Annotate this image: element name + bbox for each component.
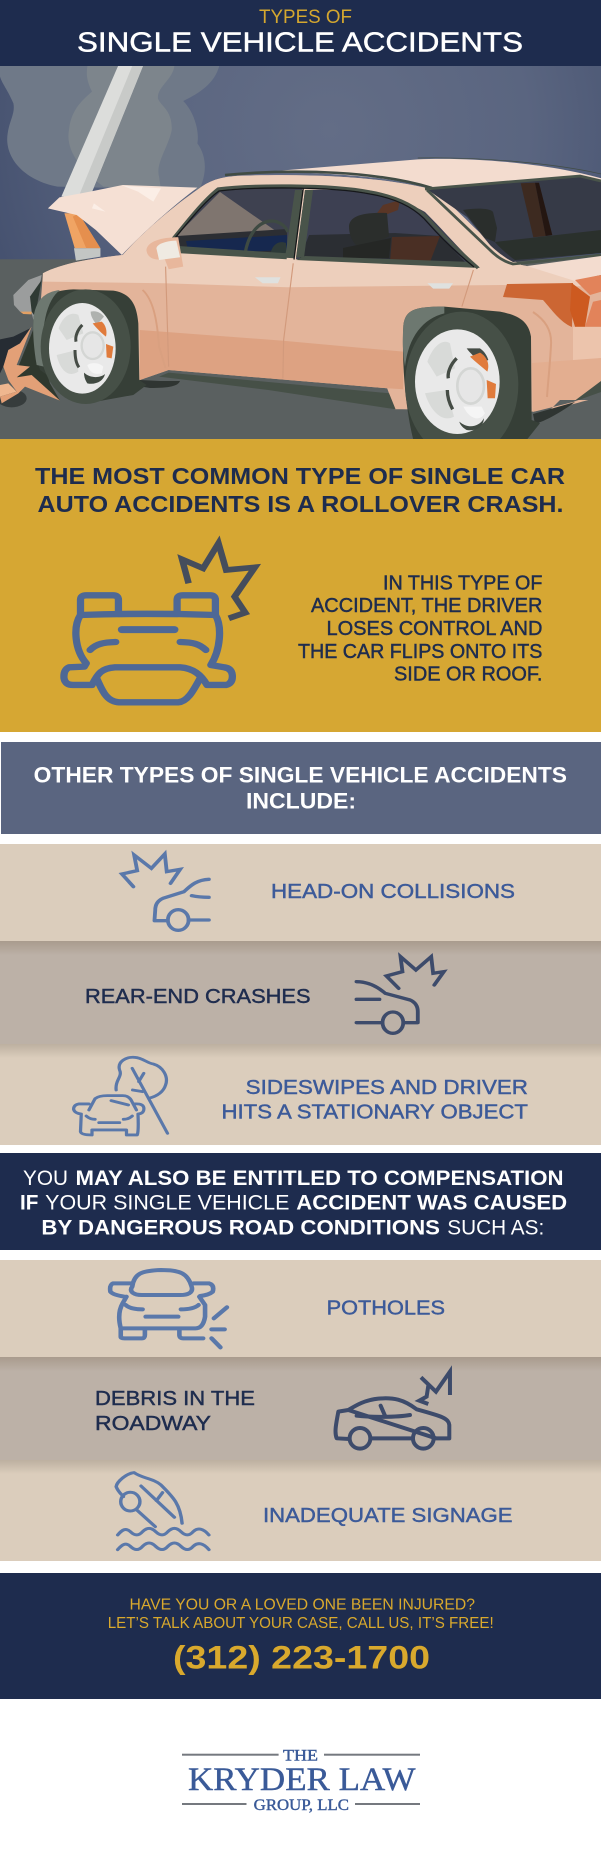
icon: rear impact — [356, 957, 444, 1033]
rear door window with seats — [172, 186, 480, 268]
rear window — [425, 176, 601, 264]
crushed bumper — [0, 275, 60, 407]
icon: overturned car with impact burst — [64, 543, 255, 702]
panel: other types heading — [1, 742, 601, 834]
panel: potholes — [0, 1260, 601, 1357]
text block: rollover description: THE CAR FLIPS ONTO ITS — [298, 641, 542, 663]
label — [222, 1076, 529, 1124]
road — [0, 259, 601, 439]
label: ROADWAY — [95, 1412, 211, 1435]
icon: car with impact bolt — [336, 1372, 450, 1449]
icon: car plunging into water — [116, 1473, 209, 1550]
label: INADEQUATE SIGNAGE — [263, 1504, 512, 1527]
panel: road conditions compensation: YOU — [23, 1167, 68, 1190]
label: DEBRIS IN THE — [95, 1387, 255, 1410]
text block: rollover description: ACCIDENT, THE DRIVER — [311, 595, 542, 617]
label: HEAD-ON COLLISIONS — [271, 880, 515, 903]
pole — [61, 66, 143, 261]
rear wheel — [402, 306, 540, 439]
front window — [176, 186, 303, 259]
mirror — [146, 237, 183, 269]
panel: inadequate signage — [0, 1460, 601, 1561]
heading: AUTO ACCIDENTS IS A ROLLOVER CRASH. — [38, 491, 564, 517]
label: REAR-END CRASHES — [85, 985, 310, 1008]
logo: the kryder law group: GROUP, LLC — [254, 1797, 349, 1814]
icon: car front with sparks — [110, 1270, 227, 1347]
smoke — [0, 66, 219, 190]
door handles — [255, 277, 453, 289]
heading — [35, 463, 565, 517]
call to action text: HAVE YOU OR A LOVED ONE BEEN INJURED? — [130, 1596, 475, 1613]
panel: other types heading: INCLUDE: — [246, 789, 356, 814]
text block: rollover description: IN THIS TYPE OF — [383, 572, 542, 594]
panel: road conditions compensation: ACCIDENT WAS CAUSED — [296, 1192, 567, 1215]
panel: sideswipes and stationary objects — [0, 1044, 601, 1145]
text block: rollover description: LOSES CONTROL AND — [326, 618, 542, 640]
header banner — [0, 0, 601, 66]
panel: road conditions compensation: IF — [20, 1192, 39, 1215]
car body — [38, 175, 601, 412]
logo: the kryder law group: KRYDER LAW — [188, 1762, 416, 1798]
trunk and rear quarter — [527, 256, 601, 424]
panel: rear-end crashes — [0, 941, 601, 1044]
label: HITS A STATIONARY OBJECT — [222, 1101, 529, 1124]
panel: debris in the roadway — [0, 1357, 601, 1460]
label — [95, 1387, 255, 1435]
roof line — [225, 172, 432, 188]
tail light — [503, 275, 601, 327]
panel: road conditions compensation: YOUR SINGLE VEHICLE — [45, 1192, 289, 1215]
panel: road conditions compensation: BY DANGEROUS ROAD CONDITIONS — [41, 1216, 440, 1239]
icon: car hitting a tree — [74, 1057, 168, 1135]
panel: road conditions compensation — [0, 1153, 601, 1250]
hood crumpled — [48, 185, 197, 255]
panel: call to action — [0, 1573, 601, 1699]
label: SIDESWIPES AND DRIVER — [246, 1076, 528, 1099]
logo: the kryder law group: THE — [283, 1748, 318, 1765]
logo: the kryder law group — [182, 1748, 420, 1814]
call to action text: LET’S TALK ABOUT YOUR CASE, CALL US, IT’S FREE! — [108, 1615, 494, 1632]
phone number: (312) 223-1700 — [173, 1639, 430, 1675]
icon: head-on impact — [122, 854, 209, 930]
panel: head-on collisions — [0, 844, 601, 941]
label: POTHOLES — [327, 1297, 445, 1320]
text block: rollover description — [298, 572, 542, 686]
panel: road conditions compensation: MAY ALSO BE ENTITLED TO COMPENSATION — [76, 1167, 564, 1190]
call to action text — [108, 1596, 494, 1632]
hero illustration: crashed car against a pole — [0, 66, 601, 458]
title: SINGLE VEHICLE ACCIDENTS — [77, 27, 523, 58]
panel: other types heading: OTHER TYPES OF SINGLE VEHICLE ACCIDENTS — [34, 763, 567, 788]
panel: road conditions compensation: SUCH AS: — [447, 1216, 544, 1239]
heading: THE MOST COMMON TYPE OF SINGLE CAR — [35, 463, 565, 489]
roof — [278, 158, 601, 187]
front wheel — [33, 289, 147, 404]
text block: rollover description: SIDE OR ROOF. — [394, 664, 542, 686]
shadow under the car — [138, 380, 180, 388]
rocker panel — [159, 373, 396, 409]
panel: most common rollover crash — [0, 439, 601, 732]
header kicker: types of: TYPES OF — [259, 6, 352, 28]
